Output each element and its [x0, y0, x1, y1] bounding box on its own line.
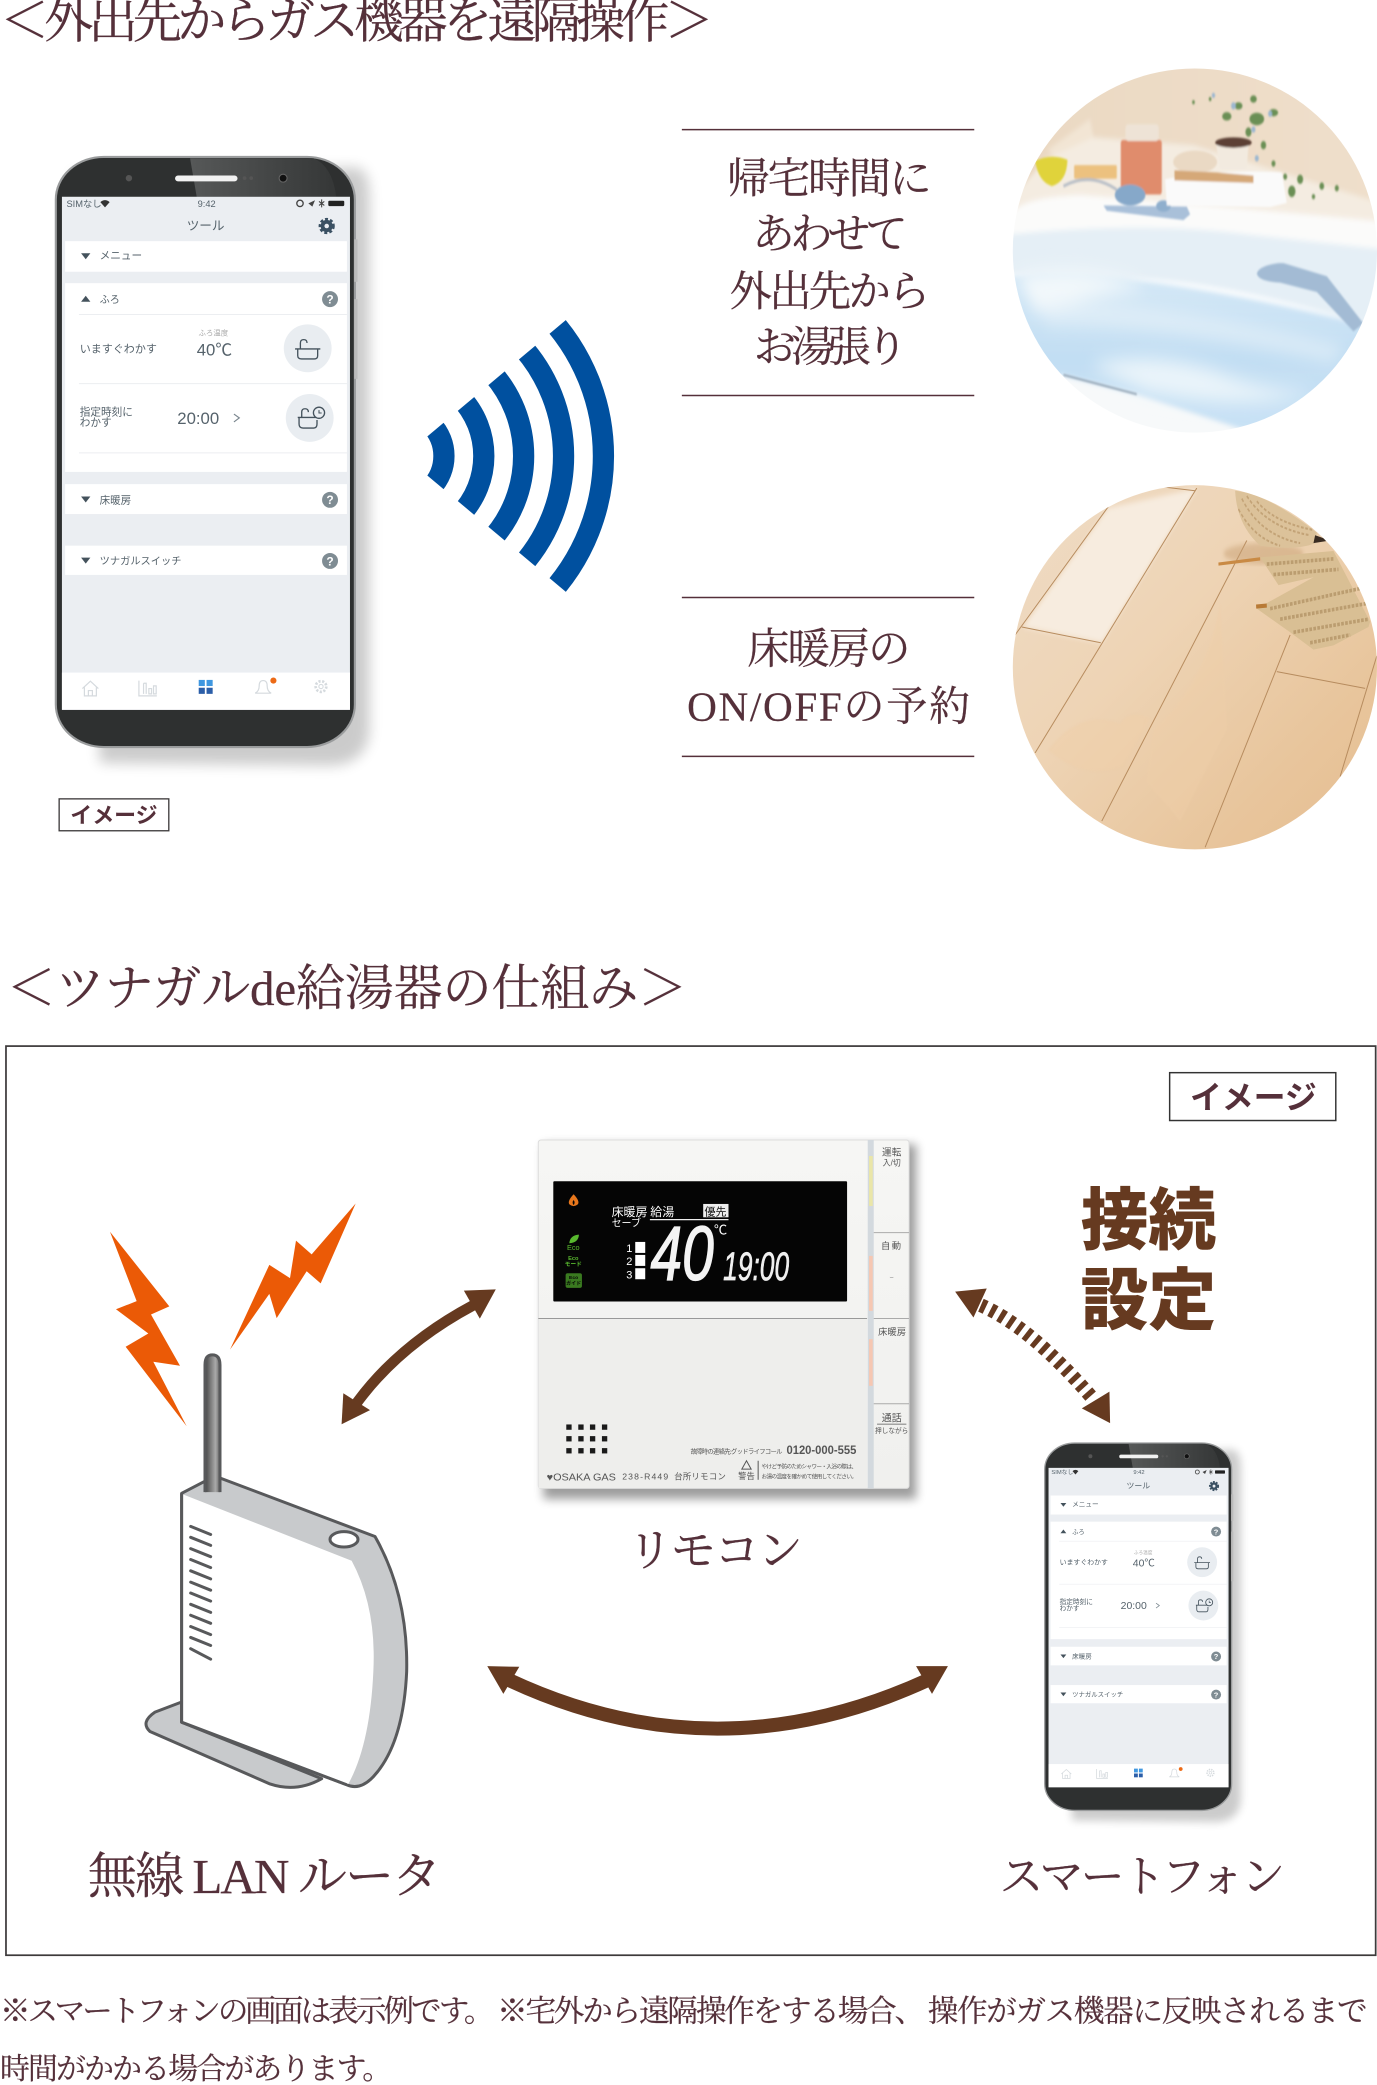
LCD display — [553, 1181, 847, 1302]
app screen: ? — [326, 292, 334, 306]
LCD display: 2 — [626, 1256, 632, 1268]
text: bath filling callout: お湯張り — [754, 325, 908, 372]
app screen: 9:42 — [198, 199, 216, 209]
app screen small: ふろ温度 — [1134, 1549, 1153, 1556]
arrow: remote to smartphone (dashed) — [955, 1289, 1110, 1423]
app screen small: いますぐわかす — [1060, 1559, 1108, 1567]
app screen — [62, 197, 350, 710]
icon: lightning bolts — [110, 1203, 356, 1426]
LCD display: Eco — [569, 1275, 578, 1281]
app screen small: ツナガルスイッチ — [1072, 1690, 1123, 1699]
printed labels on remote: 入/切 — [883, 1158, 901, 1167]
printed labels on remote: お湯の温度を確かめて使用してください。 — [761, 1472, 857, 1480]
printed labels on remote: 通話 — [882, 1412, 902, 1424]
panel: system diagram frame — [6, 1046, 1376, 1955]
remote controller — [538, 1140, 916, 1499]
app screen: ? — [326, 493, 334, 507]
app screen: ツナガルスイッチ — [100, 555, 181, 567]
printed labels on remote: やけど予防のためシャワー・入浴の際は、 — [761, 1462, 857, 1470]
text: floor heating callout: ON/OFFの予約 — [687, 683, 970, 729]
app screen: 床暖房 — [100, 493, 131, 506]
footnote: ※宅外から遠隔操作をする場合、 — [497, 1995, 925, 2029]
app screen: いますぐわかす — [80, 342, 157, 355]
footnote: 時間がかかる場合があります。 — [0, 2053, 392, 2085]
app screen: ? — [326, 554, 334, 568]
LCD display: セーブ — [612, 1217, 641, 1230]
label: smartphone: スマートフォン — [1000, 1853, 1285, 1901]
printed labels on remote: 床暖房 — [878, 1326, 906, 1337]
printed labels on remote: 0120-000-555 — [786, 1443, 857, 1457]
LCD display: ℃ — [714, 1223, 727, 1238]
app screen: わかす — [80, 417, 112, 429]
app screen small: メニュー — [1072, 1502, 1099, 1509]
photo: bathtub — [1010, 61, 1377, 441]
text: floor heating callout — [682, 598, 974, 756]
LCD display: 優先 — [705, 1205, 727, 1218]
app screen: ふろ温度 — [198, 328, 229, 338]
photo: wooden floor with knitting — [1010, 480, 1377, 858]
printed labels on remote: 運転 — [882, 1146, 902, 1158]
app screen: SIMなし — [66, 199, 102, 209]
app screen: 指定時刻に — [80, 405, 133, 418]
text: floor heating callout: 床暖房の — [747, 626, 910, 673]
title: system overview: ＜ツナガルde給湯器の仕組み＞ — [7, 961, 687, 1016]
arrow: router to smartphone — [487, 1666, 948, 1729]
printed labels on remote: 警告 — [738, 1471, 755, 1481]
printed labels on remote — [547, 1146, 908, 1483]
printed labels on remote: ♥OSAKA GAS — [547, 1472, 616, 1483]
text: bath filling callout: あわせて — [752, 212, 908, 259]
icon: wireless signal — [427, 320, 614, 592]
app screen small: ? — [1214, 1690, 1219, 1699]
text: connection setup: 設定 — [1081, 1264, 1216, 1339]
LCD display: 床暖房 — [612, 1205, 648, 1219]
arrow: router to remote — [342, 1289, 496, 1424]
image note label in panel: イメージ — [1190, 1080, 1317, 1116]
text: bath filling callout: 帰宅時間に — [727, 156, 932, 203]
image note label in panel — [1170, 1073, 1336, 1121]
app screen small: ? — [1214, 1652, 1219, 1661]
LCD display: ガイド — [566, 1280, 581, 1287]
text: bath filling callout: 外出先から — [730, 269, 930, 316]
app screen small: 指定時刻に — [1060, 1597, 1093, 1606]
printed labels on remote: 238-R449 — [622, 1472, 668, 1482]
speaker holes — [566, 1424, 607, 1453]
footnote: ※スマートフォンの画面は表示例です。 — [0, 1995, 494, 2029]
app screen small: わかす — [1060, 1605, 1080, 1613]
app screen: ツール — [187, 219, 225, 233]
app screen small: 床暖房 — [1072, 1653, 1092, 1661]
footnote: 操作がガス機器に反映されるまで — [928, 1995, 1368, 2029]
printed labels on remote: 自動 — [881, 1240, 902, 1251]
label: wireless LAN router: 無線 LAN ルータ — [88, 1849, 441, 1904]
LCD display: Eco — [568, 1256, 579, 1262]
app screen small: 40℃ — [1133, 1559, 1155, 1570]
label: remote: リモコン — [627, 1526, 803, 1576]
smartphone small — [1045, 1443, 1241, 1822]
footnote — [0, 1995, 1368, 2085]
text: connection setup: 接続 — [1081, 1184, 1216, 1259]
app screen small: 20:00 — [1121, 1601, 1147, 1612]
app screen small: ? — [1214, 1527, 1219, 1536]
printed labels on remote: 台所リモコン — [674, 1471, 726, 1481]
text: bath filling callout — [682, 130, 974, 395]
app screen: 20:00 — [177, 409, 219, 428]
LCD display: Eco — [567, 1243, 580, 1252]
printed labels on remote: 故障時の連絡先:グッドライフコール — [691, 1446, 782, 1455]
app screen: 40℃ — [197, 340, 232, 359]
LCD display: 1 — [626, 1243, 632, 1255]
app screen: メニュー — [100, 250, 142, 262]
printed labels on remote: ⌣ — [890, 1274, 894, 1281]
icon: wireless LAN router — [146, 1355, 407, 1787]
LCD display: 給湯 — [650, 1205, 674, 1219]
app screen small: SIMなし — [1051, 1469, 1074, 1476]
app screen small: ツール — [1127, 1482, 1150, 1491]
app screen: ふろ — [100, 294, 120, 306]
LCD display: モード — [565, 1261, 582, 1268]
LCD display: 19:00 — [723, 1245, 789, 1289]
LCD display: 40 — [651, 1211, 714, 1297]
image note label — [59, 799, 169, 831]
app screen small: ふろ — [1072, 1528, 1085, 1536]
smartphone with app screen — [56, 157, 370, 766]
app screen small: 9:42 — [1133, 1470, 1145, 1476]
app screen small — [1049, 1468, 1229, 1787]
text: connection setup — [1081, 1184, 1216, 1339]
printed labels on remote: 押しながら — [875, 1426, 908, 1435]
image note label: イメージ — [70, 803, 158, 828]
LCD display: 3 — [626, 1270, 632, 1282]
